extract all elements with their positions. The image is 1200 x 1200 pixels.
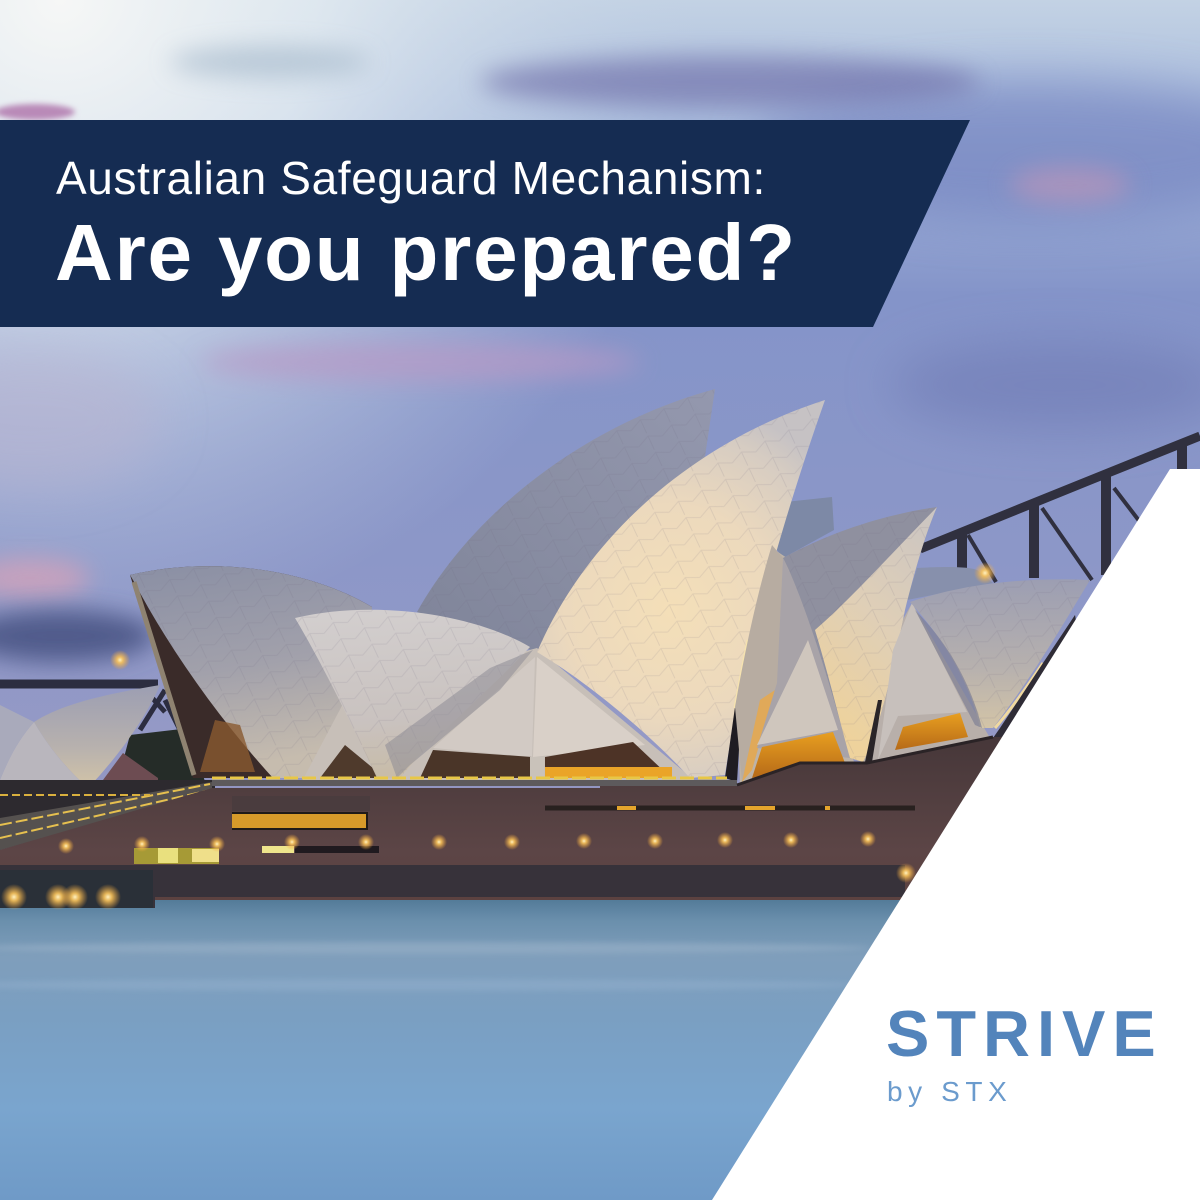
main lit shell (537, 400, 825, 782)
headline: Are you prepared? (55, 208, 797, 297)
right backing planes (737, 550, 990, 785)
right thin shell (735, 545, 783, 782)
podium wall (0, 737, 1010, 900)
centre planes and glazing (300, 648, 700, 785)
centre low shell (295, 610, 533, 778)
upper back shell (417, 389, 715, 652)
left main shell (130, 566, 372, 778)
small back shells (772, 497, 993, 600)
foreshore trees and roof (103, 728, 205, 782)
harbour bridge (0, 436, 1200, 730)
dark structure beside far right shell (993, 615, 1090, 780)
title banner (0, 120, 970, 327)
logo tagline: by STX (887, 1076, 1012, 1107)
lower harbour wall (0, 865, 905, 908)
harbour water (0, 896, 1200, 1200)
subtitle: Australian Safeguard Mechanism: (56, 152, 766, 204)
terrace stairs (0, 780, 215, 850)
logo: STRIVE by STX (886, 997, 1163, 1107)
lamps (1, 562, 996, 910)
far right planes and glazing (878, 603, 968, 760)
right planes and glazing (752, 558, 850, 778)
right main shell (783, 507, 937, 762)
left shells (0, 685, 160, 788)
sky (0, 0, 1200, 920)
far right shell (910, 579, 1090, 728)
logo wordmark: STRIVE (886, 997, 1163, 1070)
podium windows (134, 796, 915, 864)
